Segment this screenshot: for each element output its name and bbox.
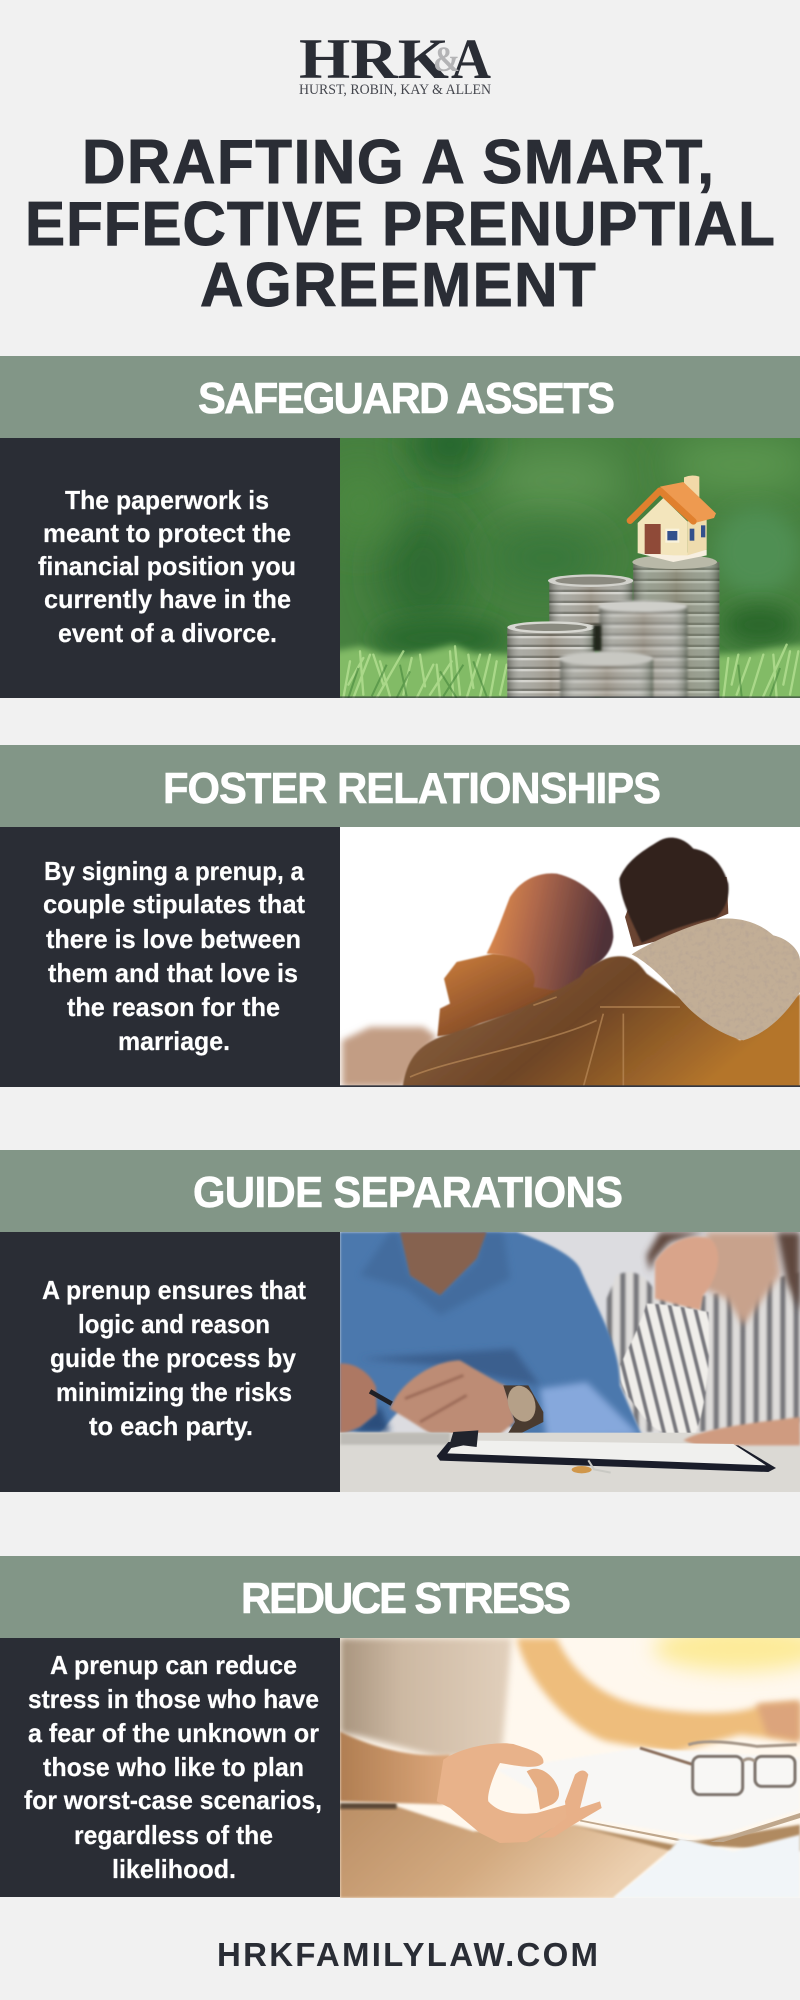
panel: reduce stress: [0, 1556, 800, 1898]
base: [637, 550, 707, 562]
door: [645, 524, 661, 554]
glasses: [640, 1742, 797, 1795]
logo: HRK&A: [299, 28, 491, 98]
window: [665, 529, 679, 543]
white sleeve: [613, 1835, 800, 1898]
body text: [38, 485, 296, 648]
man's jacket: [403, 956, 800, 1087]
title: DRAFTING A SMART,: [82, 127, 714, 196]
woman's hair: [647, 1232, 800, 1312]
body text: for worst-case scenarios,: [24, 1785, 322, 1815]
front wall: [638, 498, 687, 555]
wedding rings: [572, 1460, 611, 1473]
man's shirt: [340, 1232, 643, 1439]
roof plane: [660, 482, 716, 523]
man's right hand: [390, 1360, 515, 1440]
photo: couple embracing: [340, 827, 800, 1087]
text panel: [0, 827, 340, 1087]
body text: a fear of the unknown or: [28, 1718, 319, 1748]
body text: likelihood.: [112, 1854, 236, 1884]
body text: The paperwork is: [65, 485, 269, 515]
body text: event of a divorce.: [58, 618, 277, 648]
man's hair: [619, 838, 729, 943]
heading: SAFEGUARD ASSETS: [198, 374, 615, 423]
body text: them and that love is: [48, 958, 298, 988]
body text: marriage.: [118, 1026, 230, 1056]
body text: regardless of the: [74, 1820, 273, 1850]
tablet: [497, 1748, 800, 1842]
woman's hair: [487, 873, 613, 990]
coin stack tall: [632, 555, 719, 698]
body text: financial position you: [38, 551, 296, 581]
woman's shirt: [607, 1272, 800, 1432]
heading: REDUCE STRESS: [241, 1574, 571, 1623]
yellow glow: [653, 1625, 800, 1671]
chimney: [684, 475, 699, 497]
woman's neck and face: [703, 1232, 780, 1325]
body text: A prenup ensures that: [42, 1275, 306, 1305]
grass: [333, 645, 800, 705]
body text: to each party.: [89, 1411, 253, 1441]
woman's hand on table: [683, 1417, 800, 1445]
body text: By signing a prenup, a: [44, 856, 304, 886]
body text: those who like to plan: [43, 1752, 304, 1782]
body text: guide the process by: [50, 1343, 296, 1373]
panel: guide separations: [0, 1150, 800, 1492]
body text: there is love between: [46, 924, 301, 954]
upper arm: [517, 1638, 800, 1753]
heading band: [0, 1556, 800, 1638]
heading band: [0, 1150, 800, 1232]
title: AGREEMENT: [200, 250, 596, 319]
photo: house on coin stacks: [340, 438, 800, 698]
coin stack back: [548, 574, 633, 638]
heading: FOSTER RELATIONSHIPS: [163, 764, 661, 813]
pen: [370, 1391, 392, 1404]
body text: A prenup can reduce: [50, 1650, 297, 1680]
blurred building: [342, 1027, 437, 1087]
table: [340, 1806, 673, 1898]
body text: [24, 1650, 322, 1884]
heading band: [0, 356, 800, 438]
photo: couple signing: [340, 1232, 800, 1492]
side windows: [690, 529, 694, 541]
forearm: [340, 1731, 450, 1805]
body text: the reason for the: [67, 992, 280, 1022]
text panel: [0, 438, 340, 698]
footer url: HRKFAMILYLAW.COM: [217, 1936, 598, 1973]
coin stack left: [507, 621, 601, 698]
body text: [42, 1275, 306, 1441]
roof edge: [630, 491, 693, 521]
heading: GUIDE SEPARATIONS: [193, 1168, 623, 1217]
title: [25, 127, 775, 319]
text panel: [0, 1232, 340, 1492]
body text: currently have in the: [44, 584, 291, 614]
coin stack front: [559, 652, 653, 698]
panel: safeguard assets: [0, 356, 800, 705]
man's neck: [625, 877, 728, 947]
body text: minimizing the risks: [56, 1377, 292, 1407]
shirt: [340, 1638, 512, 1757]
table: [340, 1433, 800, 1492]
clipboard: [437, 1430, 776, 1472]
watch: [503, 1382, 543, 1435]
logo letter A: A: [451, 28, 491, 91]
logo firm name: HURST, ROBIN, KAY & ALLEN: [299, 82, 491, 98]
icon: toy house: [630, 475, 716, 562]
logo letters HRK: HRK: [299, 28, 449, 91]
woman's hand: [655, 1237, 718, 1310]
text panel: [0, 1638, 340, 1897]
body text: couple stipulates that: [43, 889, 305, 919]
body text: [43, 856, 305, 1056]
man's left hand: [340, 1363, 377, 1435]
man's neck: [400, 1232, 487, 1295]
knit hood: [632, 918, 800, 1040]
body text: stress in those who have: [28, 1684, 319, 1714]
panel: foster relationships: [0, 745, 800, 1087]
woman's sleeve: [619, 1304, 709, 1439]
coin stack middle: [598, 601, 688, 698]
logo ampersand: &: [433, 39, 460, 79]
photo: meditating hand: [340, 1625, 800, 1898]
side wall: [687, 517, 707, 555]
body text: meant to protect the: [43, 518, 291, 548]
woman's coat: [437, 954, 600, 1036]
heading band: [0, 745, 800, 827]
hand: [437, 1743, 602, 1843]
body text: logic and reason: [78, 1309, 270, 1339]
title: EFFECTIVE PRENUPTIAL: [25, 189, 775, 258]
